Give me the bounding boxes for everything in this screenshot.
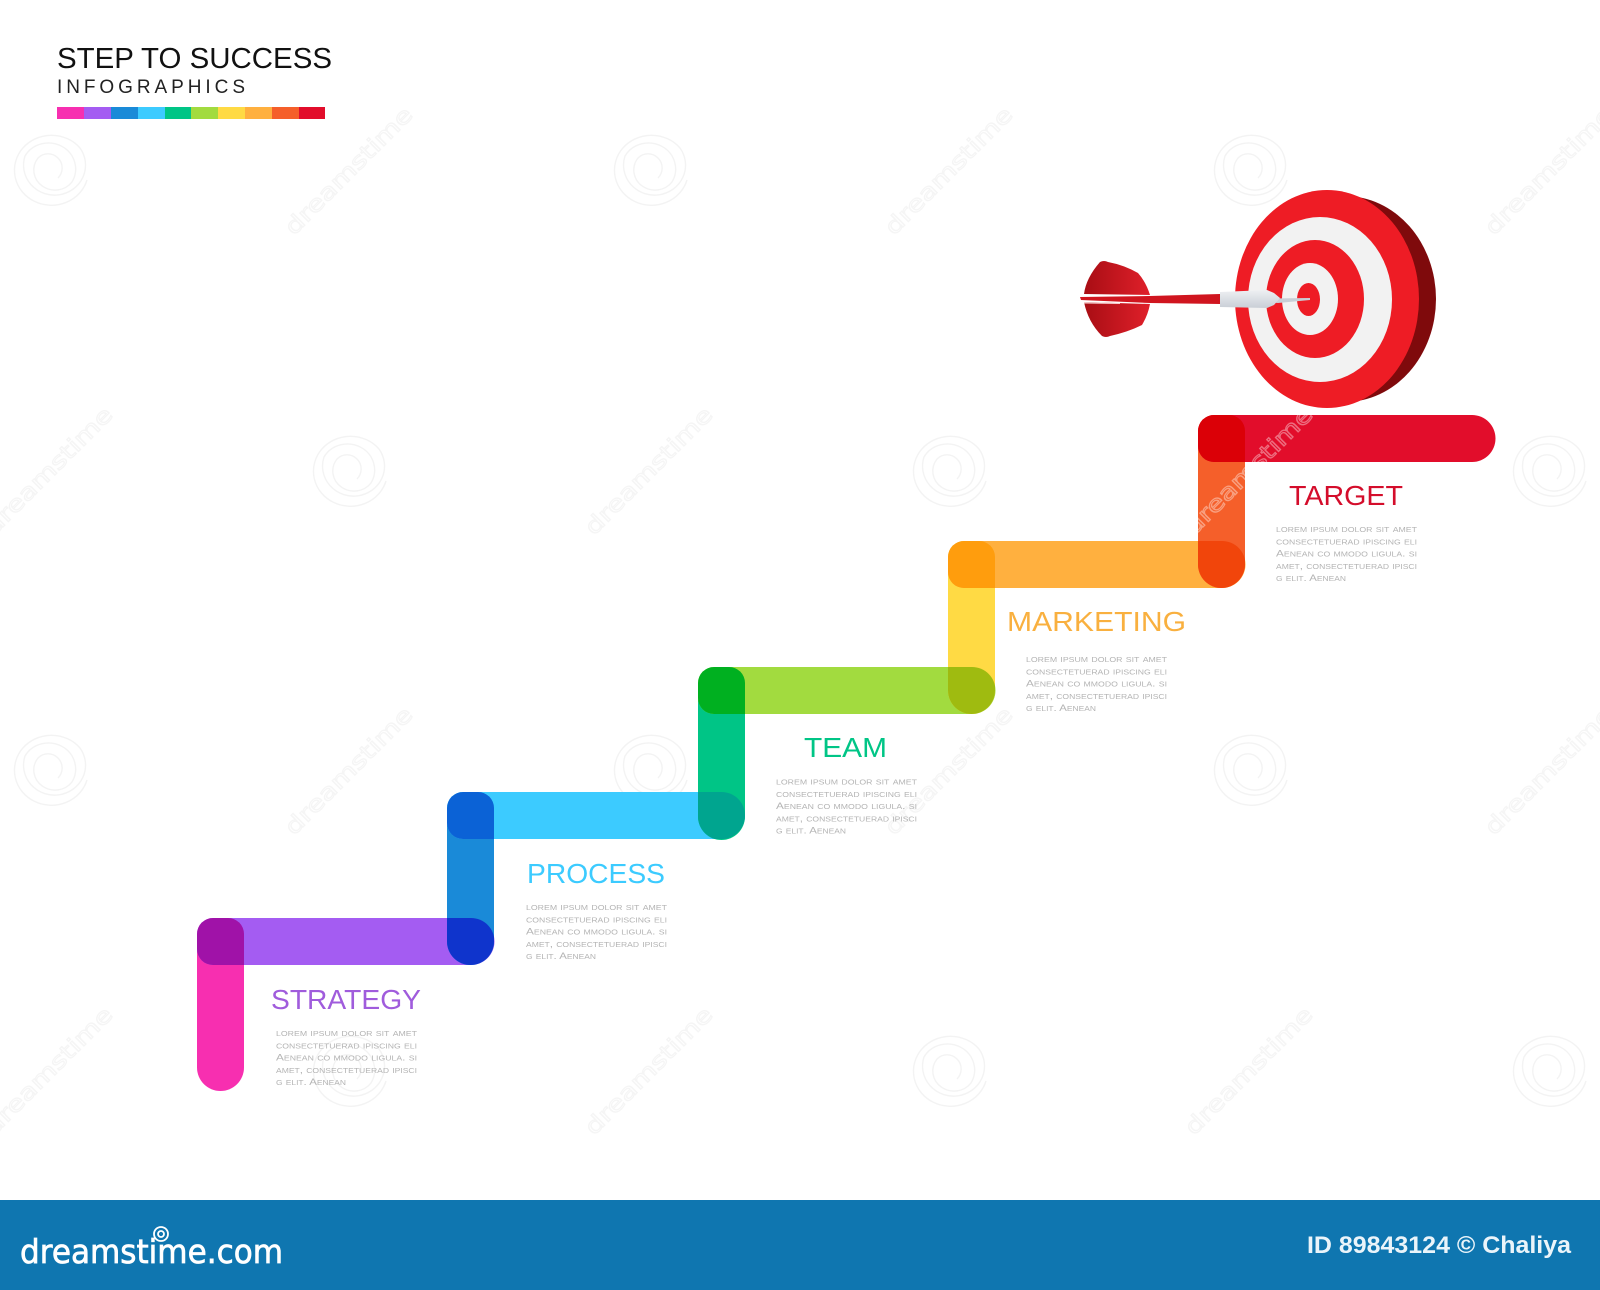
label: process [526, 858, 668, 962]
step 5 tread [1198, 415, 1495, 462]
label: marketing [1007, 606, 1186, 714]
process body text: consectetuerad ipiscing eli [526, 914, 667, 926]
icon: dart [1080, 261, 1310, 337]
strategy body text: Aenean co mmodo ligula. si [276, 1052, 417, 1064]
team body text: amet, consectetuerad ipisci [776, 814, 917, 824]
watermark pattern: dreamstime [880, 702, 1018, 840]
team heading: TEAM [804, 732, 887, 763]
watermark pattern: dreamstime [880, 102, 1018, 240]
footer bar [0, 1200, 1600, 1290]
icon: bullseye target [1235, 190, 1436, 408]
title block [57, 43, 332, 119]
team body text [776, 776, 918, 836]
target body text [1276, 524, 1418, 584]
team body text: consectetuerad ipiscing eli [776, 789, 917, 800]
team body text: g elit. Aenean [776, 826, 846, 836]
target body text: amet, consectetuerad ipisci [1276, 561, 1417, 572]
marketing body text: Aenean co mmodo ligula. si [1026, 678, 1167, 690]
target body text: Aenean co mmodo ligula. si [1276, 548, 1417, 560]
marketing body text [1026, 654, 1168, 714]
target body text: g elit. Aenean [1276, 573, 1346, 584]
step 1 riser [197, 918, 244, 1091]
step 3 tread [698, 667, 995, 714]
watermark pattern: dreamstime [280, 702, 418, 840]
step 4 tread [948, 541, 1245, 588]
step 1 tread [197, 918, 494, 965]
strategy body text [276, 1028, 418, 1088]
subheading: INFOGRAPHICS [57, 77, 245, 98]
watermark pattern: dreamstime [580, 1002, 718, 1140]
step 4 riser [948, 541, 995, 714]
step 3 riser [698, 667, 745, 840]
strategy body text: amet, consectetuerad ipisci [276, 1065, 417, 1076]
marketing body text: lorem ipsum dolor sit amet [1026, 654, 1168, 665]
step 5 riser [1198, 415, 1245, 588]
marketing body text: consectetuerad ipiscing eli [1026, 666, 1167, 678]
step 2 tread [447, 792, 745, 839]
strategy body text: g elit. Aenean [276, 1077, 346, 1088]
process body text: amet, consectetuerad ipisci [526, 939, 667, 950]
rainbow colour strip [57, 107, 325, 119]
marketing body text: amet, consectetuerad ipisci [1026, 691, 1167, 702]
label: target [1276, 480, 1418, 584]
overlap corners [197, 415, 1495, 965]
logo text: dreamstime.com [20, 1232, 283, 1271]
target body text: consectetuerad ipiscing eli [1276, 536, 1417, 548]
step 2 riser [447, 792, 494, 965]
marketing body text: g elit. Aenean [1026, 703, 1096, 714]
target body text: lorem ipsum dolor sit amet [1276, 524, 1418, 535]
staircase ribbon [197, 415, 1495, 1091]
marketing heading: MARKETING [1007, 606, 1186, 637]
watermark pattern: dreamstime [280, 102, 418, 240]
strategy body text: consectetuerad ipiscing eli [276, 1040, 417, 1052]
strategy heading: STRATEGY [271, 984, 421, 1015]
watermark pattern: dreamstime [1480, 702, 1600, 840]
watermark over ribbon: dreamstime [1180, 402, 1318, 540]
icon: logo spiral [154, 1227, 168, 1241]
heading: STEP TO SUCCESS [57, 43, 332, 75]
process body text [526, 902, 668, 962]
target heading: TARGET [1289, 480, 1403, 511]
image id and credit: ID 89843124 © Chaliya [1307, 1232, 1572, 1259]
process body text: lorem ipsum dolor sit amet [526, 902, 668, 913]
label: team [776, 732, 918, 836]
watermark pattern: dreamstime [1480, 102, 1600, 240]
process body text: Aenean co mmodo ligula. si [526, 926, 667, 938]
process body text: g elit. Aenean [526, 951, 596, 962]
team body text: lorem ipsum dolor sit amet [776, 776, 918, 788]
watermark pattern: dreamstime [1180, 1002, 1318, 1140]
label: strategy [271, 984, 421, 1088]
process heading: PROCESS [527, 858, 665, 889]
strategy body text: lorem ipsum dolor sit amet [276, 1028, 418, 1039]
team body text: Aenean co mmodo ligula. si [776, 801, 917, 812]
watermark pattern: dreamstime [580, 402, 718, 540]
